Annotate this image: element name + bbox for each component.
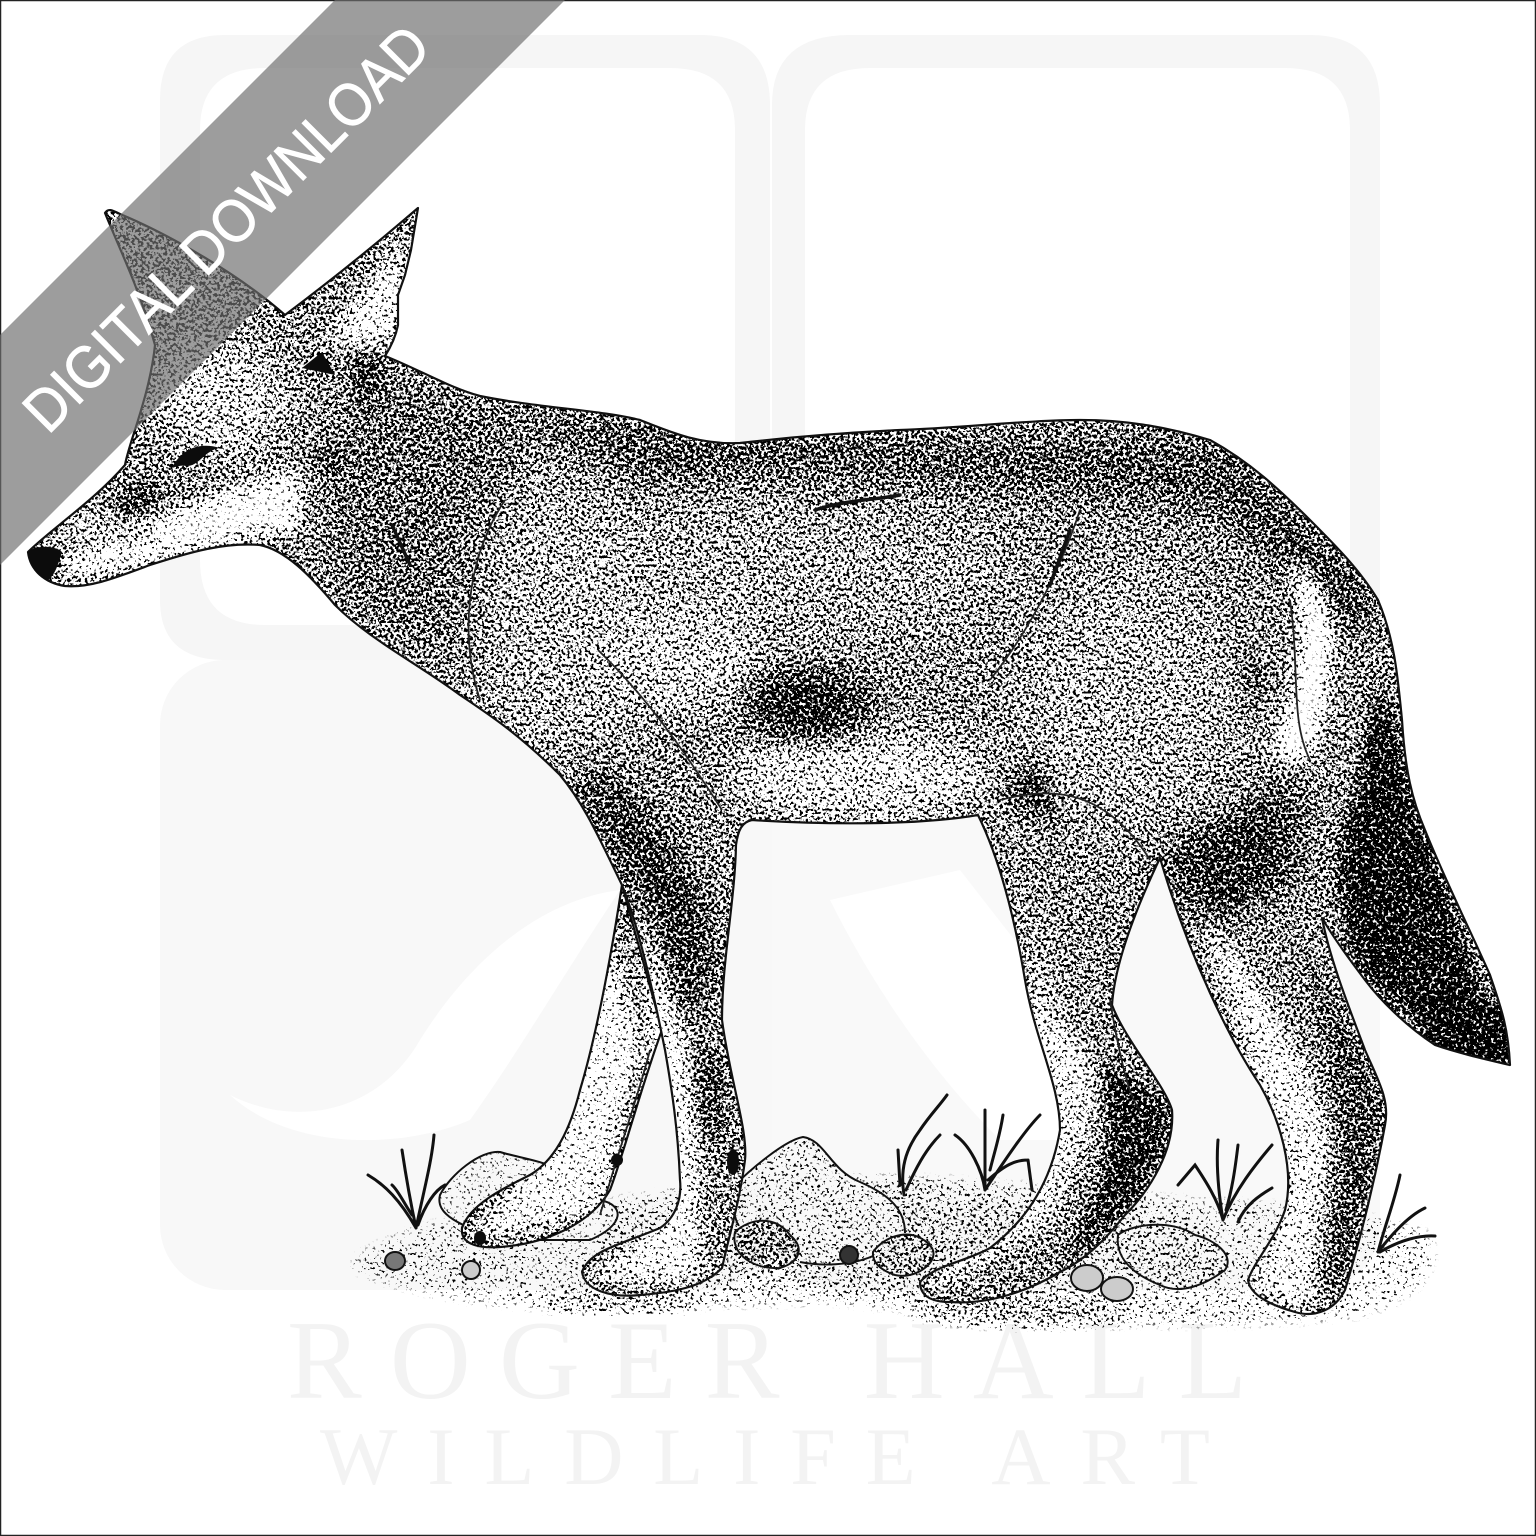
far foreleg base (462, 885, 662, 1247)
wrist marks (727, 1149, 739, 1175)
coyote white underlay (28, 208, 1510, 1314)
coyote inner contour lines (469, 500, 1310, 1215)
rock outlines (439, 1137, 1228, 1289)
watermark: Roger Hall Wildlife Art logo (160, 35, 1380, 1502)
watermark text: WILDLIFE ART: WILDLIFE ART (320, 1411, 1210, 1502)
coyote stippled shading (34, 211, 1509, 1313)
grass tufts (368, 1095, 1435, 1252)
coyote illustration (26, 206, 1512, 1316)
watermark logo panes (160, 35, 1380, 1290)
dark accents (748, 675, 868, 735)
coyote features: nose, eye, ear marks, paw marks (28, 352, 739, 1245)
banner ribbon (0, 0, 565, 565)
body tones (480, 410, 1280, 520)
pebbles (385, 1246, 1133, 1301)
neck (320, 360, 520, 680)
head tones (60, 470, 300, 575)
legs lighter (590, 880, 700, 1280)
banner: Digital Download (0, 0, 565, 565)
nose (28, 547, 62, 580)
eye (172, 446, 220, 468)
coyote dark fur streaks (392, 495, 1070, 585)
watermark text: ROGER HALL: ROGER HALL (287, 1299, 1247, 1423)
coyote outline (28, 208, 1510, 1314)
ear base mark (302, 352, 335, 375)
